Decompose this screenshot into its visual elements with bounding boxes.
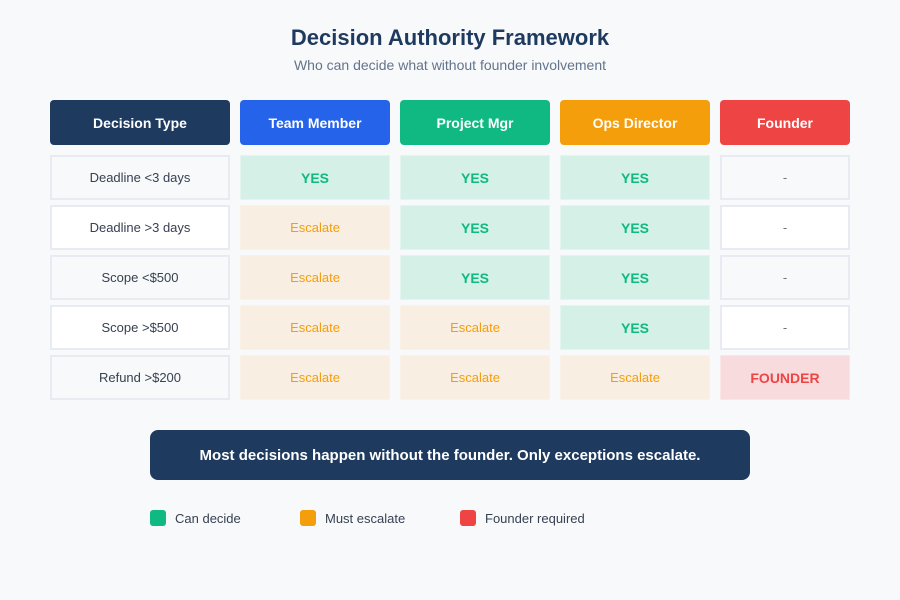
row 5: Escalate xyxy=(450,370,500,385)
row 3: YES xyxy=(621,270,649,286)
row 4: YES xyxy=(621,320,649,336)
header: team member xyxy=(240,100,390,145)
legend: can decide: Can decide xyxy=(175,511,241,526)
header: founder: Founder xyxy=(757,114,813,130)
legend: must escalate: Must escalate xyxy=(325,511,405,526)
row 1: YES xyxy=(621,170,649,186)
legend xyxy=(150,510,585,526)
row 1: YES xyxy=(301,170,329,186)
row 4: Escalate xyxy=(450,320,500,335)
header: project mgr: Project Mgr xyxy=(436,114,514,130)
callout banner: Most decisions happen without the founder. Only exceptions escalate. xyxy=(200,446,700,464)
row 3: Escalate xyxy=(290,270,340,285)
row 1: - xyxy=(783,170,787,185)
header: team member: Team Member xyxy=(268,114,362,130)
header: ops director: Ops Director xyxy=(593,114,677,130)
title: Decision Authority Framework xyxy=(291,25,609,50)
header: founder xyxy=(720,100,850,145)
row 2: Escalate xyxy=(290,220,340,235)
row 3 xyxy=(50,255,850,300)
row 4: - xyxy=(783,320,787,335)
header: ops director xyxy=(560,100,710,145)
row 2: YES xyxy=(621,220,649,236)
row 2: YES xyxy=(461,220,489,236)
table xyxy=(50,100,850,400)
row 5: FOUNDER xyxy=(750,370,820,386)
row 4: Escalate xyxy=(290,320,340,335)
row 5: Escalate xyxy=(290,370,340,385)
row 2: - xyxy=(783,220,787,235)
subtitle: Who can decide what without founder involvement xyxy=(294,57,606,73)
row 1: Deadline <3 days xyxy=(90,170,190,185)
row 1 xyxy=(50,155,850,200)
row 3: - xyxy=(783,270,787,285)
header: decision type: Decision Type xyxy=(93,114,187,130)
row 3: YES xyxy=(461,270,489,286)
row 2 xyxy=(50,205,850,250)
row 5: Refund >$200 xyxy=(99,370,181,385)
row 5: Escalate xyxy=(610,370,660,385)
row 3: Scope <$500 xyxy=(102,270,178,285)
header: decision type xyxy=(50,100,230,145)
row 5 xyxy=(50,355,850,400)
header: project mgr xyxy=(400,100,550,145)
legend: founder required: Founder required xyxy=(485,511,585,526)
row 1: YES xyxy=(461,170,489,186)
callout banner xyxy=(150,430,750,480)
row 2: Deadline >3 days xyxy=(90,220,190,235)
legend: can decide xyxy=(150,510,241,526)
row 4: Scope >$500 xyxy=(102,320,178,335)
row 4 xyxy=(50,305,850,350)
